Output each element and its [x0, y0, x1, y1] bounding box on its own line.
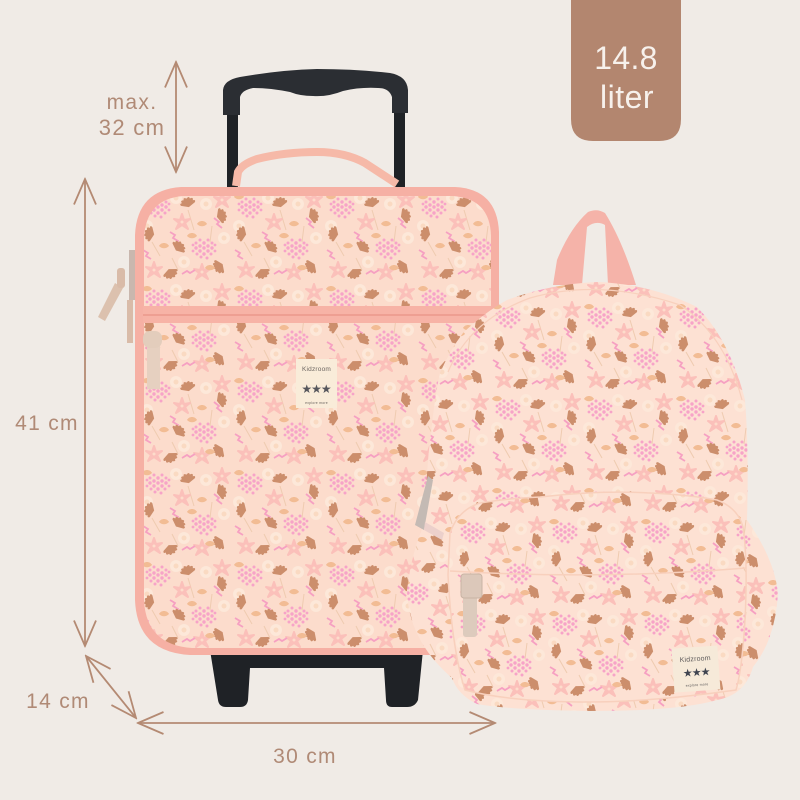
brand label: [296, 359, 337, 408]
brand label: explore more: [305, 401, 328, 405]
brand label: Kidzroom: [302, 366, 331, 373]
dimension: handle max 32 cm: [99, 62, 176, 172]
badge: capacity 14.8 liter: 14.8: [594, 40, 658, 76]
telescopic handle: [223, 69, 408, 187]
front pocket: [448, 492, 746, 702]
dimension: depth 14 cm: [26, 656, 136, 718]
side zipper pull: [98, 250, 135, 343]
side clip: [415, 476, 444, 540]
pocket flap seam: [450, 568, 746, 575]
badge: capacity 14.8 liter: liter: [600, 79, 654, 115]
badge: capacity 14.8 liter: [571, 0, 681, 141]
dimension: handle max 32 cm: max.: [107, 91, 157, 114]
backpack label: explore more: [686, 682, 709, 688]
dimension: width 30 cm: 30 cm: [273, 745, 337, 768]
backpack: [407, 210, 778, 711]
backpack label: ★★★: [683, 666, 711, 680]
backpack label: Kidzroom: [679, 655, 711, 664]
suitcase printed fabric: [144, 196, 491, 648]
dimension: height 41 cm: 41 cm: [15, 412, 79, 435]
trolley suitcase: [98, 69, 499, 707]
backpack body: [407, 282, 778, 711]
front zipper: [143, 306, 491, 389]
dimension: handle max 32 cm: 32 cm: [99, 115, 165, 140]
brand label: ★★★: [301, 382, 331, 396]
wheel housing: [210, 650, 423, 707]
backpack label: [671, 646, 720, 693]
top carry handle: [236, 152, 397, 186]
suitcase body: [135, 187, 499, 655]
top seam: [448, 289, 742, 400]
top loop handle: [553, 210, 636, 285]
dimension: depth 14 cm: 14 cm: [26, 690, 90, 713]
pocket buckle: [461, 574, 482, 637]
